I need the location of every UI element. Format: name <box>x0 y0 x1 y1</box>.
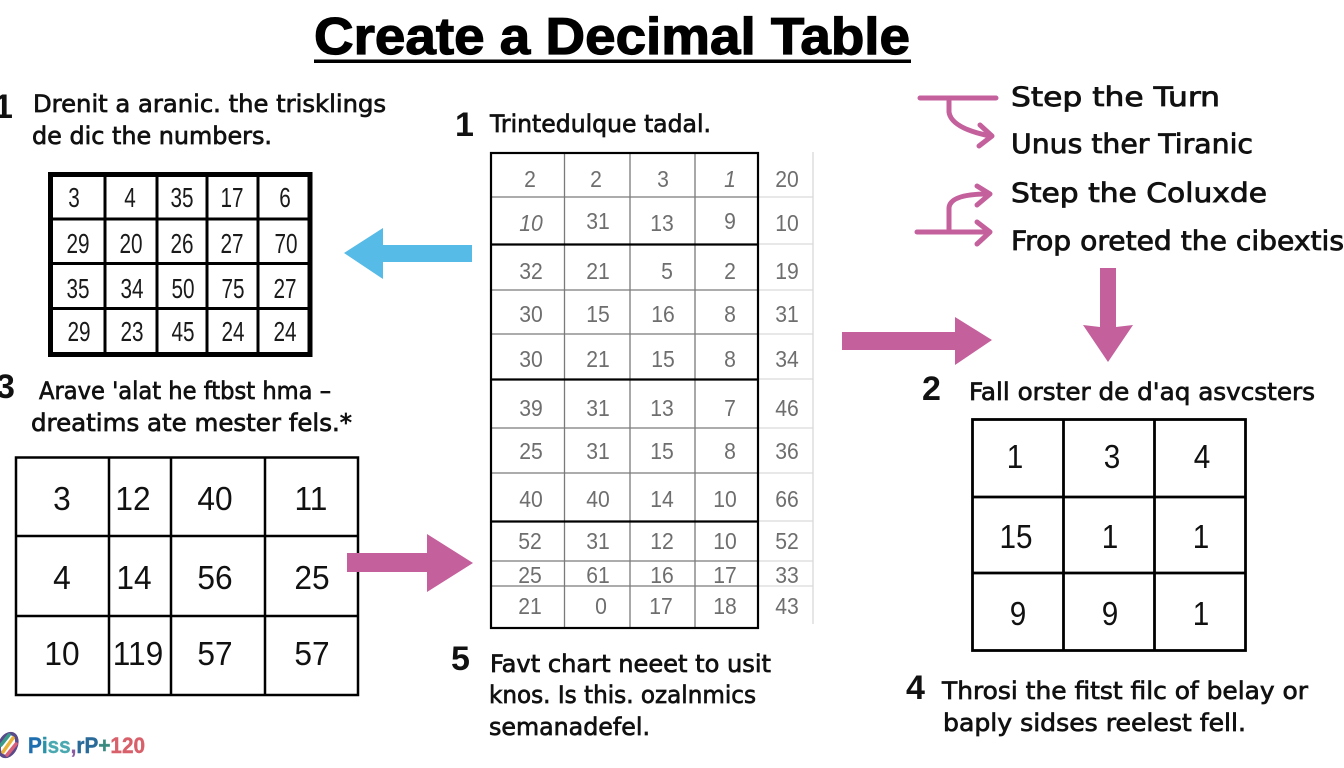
table: small 5x4 grid: 4 <box>124 183 136 214</box>
centre heading: Trintedulque tadal. <box>489 110 711 138</box>
step 4 text <box>941 677 1308 737</box>
table: 4x3 grid: 119 <box>113 635 163 672</box>
step number 4: 4 <box>906 669 925 707</box>
table: large centre table: 31 <box>775 301 799 327</box>
step list text: Unus ther Tiranic <box>1011 129 1253 160</box>
table: small 5x4 grid: 29 <box>66 229 90 260</box>
table: large centre table: 7 <box>724 395 736 421</box>
table: large centre table: 1 <box>724 166 736 192</box>
table: large centre table: 25 <box>519 438 543 464</box>
table: large centre table: 14 <box>650 486 674 512</box>
step 4 text: Throsi the fitst filc of belay or <box>941 677 1308 705</box>
table: large centre table: 46 <box>775 395 799 421</box>
table: small 5x4 grid: 6 <box>279 183 291 214</box>
arrow: pink right to step 2 <box>842 317 992 365</box>
table: large centre table: 31 <box>586 438 610 464</box>
table: small 5x4 grid: 17 <box>220 183 244 214</box>
table: large centre table: 25 <box>518 562 542 588</box>
table: 4x3 grid: 14 <box>116 559 152 596</box>
table: large centre table: 10 <box>775 210 799 236</box>
table: large centre table: 31 <box>586 528 610 554</box>
table: small 5x4 grid: 75 <box>221 274 245 305</box>
arrow: blue left <box>344 228 472 279</box>
table: 4x3 grid: 4 <box>53 559 71 596</box>
table: small 5x4 grid: 27 <box>273 274 297 305</box>
table: large centre table: 32 <box>519 258 543 284</box>
step 5 text: semanadefel. <box>489 713 650 741</box>
step 1 text: de dic the numbers. <box>32 122 272 150</box>
table: large centre table: 40 <box>519 486 543 512</box>
step 5 text <box>489 650 771 741</box>
step 5 text: knos. Is this. ozalnmics <box>489 681 756 709</box>
step number 5: 5 <box>451 640 470 678</box>
table: large centre table: 15 <box>651 346 675 372</box>
panel: top right step list <box>917 82 1344 257</box>
table: small 5x4 grid: 50 <box>171 274 195 305</box>
step 4 text: baply sidses reelest fell. <box>943 709 1246 737</box>
table: small 5x4 grid: 3 <box>68 183 80 214</box>
table: 4x3 grid: 40 <box>197 480 233 517</box>
arrow: pink right from step 3 table <box>347 534 473 592</box>
table: large centre table: 43 <box>775 593 799 619</box>
table: 3x3 grid: 4 <box>1194 439 1210 475</box>
table: 3x3 grid: 9 <box>1102 596 1118 632</box>
table: large centre table: 2 <box>724 258 736 284</box>
icon: branch arrow up <box>917 186 990 244</box>
table: large centre table: 21 <box>586 258 610 284</box>
table: 3x3 grid: 1 <box>1193 596 1209 632</box>
table: 3x3 grid: 15 <box>999 519 1033 555</box>
table: small 5x4 grid: 35 <box>66 274 90 305</box>
table: small 5x4 grid: 26 <box>170 229 194 260</box>
table: large centre table: 21 <box>586 346 610 372</box>
table: 4x3 grid: 10 <box>44 635 80 672</box>
table: large centre table: 15 <box>586 301 610 327</box>
table: large centre table: 8 <box>724 438 736 464</box>
table: small 5x4 grid: 70 <box>274 229 298 260</box>
table: large centre table: 16 <box>650 562 674 588</box>
table: 3x3 grid: 1 <box>1102 519 1118 555</box>
table: large centre table: 40 <box>586 486 610 512</box>
table: 4x3 grid: 57 <box>294 635 330 672</box>
step 3 text: dreatims ate mester fels.* <box>31 409 352 437</box>
table: large centre table: 30 <box>519 346 543 372</box>
step number 1 centre: 1 <box>455 106 474 144</box>
logo <box>0 731 145 759</box>
step list text: Step the Turn <box>1011 82 1220 113</box>
table: large centre table: 30 <box>519 301 543 327</box>
table: 4x3 grid <box>16 457 358 695</box>
table: large centre table <box>491 152 813 628</box>
table: large centre table: 9 <box>724 208 736 234</box>
table: 4x3 grid: 25 <box>294 559 330 596</box>
table: large centre table: 31 <box>586 208 610 234</box>
table: 3x3 grid <box>972 419 1246 651</box>
table: large centre table: 8 <box>724 346 736 372</box>
table: large centre table: 18 <box>713 593 737 619</box>
table: small 5x4 grid <box>50 174 310 354</box>
step 3 text <box>31 377 352 437</box>
table: 4x3 grid: 12 <box>115 480 151 517</box>
table: 3x3 grid: 1 <box>1193 519 1209 555</box>
table: 3x3 grid: 1 <box>1007 439 1023 475</box>
table: large centre table: 61 <box>586 562 610 588</box>
table: large centre table: 13 <box>650 210 674 236</box>
table: large centre table: 17 <box>649 593 673 619</box>
table: large centre table: 66 <box>775 486 799 512</box>
step list text <box>1011 82 1344 257</box>
table: large centre table: 17 <box>713 562 737 588</box>
table: small 5x4 grid: 34 <box>120 274 144 305</box>
title: Create a Decimal Table <box>314 8 910 66</box>
logo text: Piss,rP+120 <box>28 733 145 758</box>
step list text: Step the Coluxde <box>1011 178 1267 209</box>
panel: step 2 and 4 <box>906 370 1315 737</box>
table: 4x3 grid: 57 <box>197 635 233 672</box>
arrow: pink down <box>1083 268 1133 362</box>
panel: step 3 instructions and table <box>0 368 358 695</box>
panel: step 1 instructions and table <box>0 88 386 354</box>
step number 2: 2 <box>922 370 941 408</box>
table: 4x3 grid: 11 <box>295 480 327 517</box>
step list text: Frop oreted the cibextis <box>1011 226 1344 257</box>
table: large centre table: 16 <box>651 301 675 327</box>
table: large centre table: 3 <box>657 166 669 192</box>
table: large centre table: 21 <box>518 593 542 619</box>
table: large centre table: 34 <box>775 346 799 372</box>
table: large centre table: 10 <box>713 528 737 554</box>
icon: logo mark <box>0 731 20 759</box>
table: large centre table: 31 <box>586 395 610 421</box>
table: small 5x4 grid: 45 <box>171 317 195 348</box>
table: large centre table: 36 <box>775 438 799 464</box>
table: 4x3 grid: 56 <box>197 559 233 596</box>
table: 3x3 grid: 9 <box>1010 596 1026 632</box>
table: large centre table: 2 <box>524 166 536 192</box>
step 1 text <box>32 90 386 150</box>
table: large centre table: 8 <box>724 301 736 327</box>
table: large centre table: 2 <box>590 166 602 192</box>
table: large centre table: 15 <box>650 438 674 464</box>
table: large centre table: 19 <box>775 258 799 284</box>
table: small 5x4 grid: 23 <box>120 317 144 348</box>
icon: branch arrow down <box>920 98 996 146</box>
table: large centre table: 10 <box>519 210 543 236</box>
table: large centre table: 12 <box>650 528 674 554</box>
table: large centre table: 20 <box>775 166 799 192</box>
table: large centre table: 33 <box>775 562 799 588</box>
table: large centre table: 0 <box>595 593 607 619</box>
table: large centre table: 5 <box>661 258 673 284</box>
table: 4x3 grid: 3 <box>53 480 71 517</box>
table: small 5x4 grid: 20 <box>119 229 143 260</box>
table: small 5x4 grid: 24 <box>273 317 297 348</box>
step 3 text: Arave 'alat he ftbst hma – <box>39 377 331 405</box>
table: large centre table: 10 <box>713 486 737 512</box>
table: large centre table: 52 <box>518 528 542 554</box>
panel: centre column <box>451 106 813 741</box>
table: large centre table: 39 <box>519 395 543 421</box>
step 2 text: Fall orster de d'aq asvcsters <box>969 378 1315 406</box>
step 1 text: Drenit a aranic. the trisklings <box>33 90 386 118</box>
table: small 5x4 grid: 27 <box>220 229 244 260</box>
table: large centre table: 52 <box>775 528 799 554</box>
step 5 text: Favt chart neeet to usit <box>490 650 771 678</box>
table: large centre table: 13 <box>650 395 674 421</box>
table: small 5x4 grid: 35 <box>170 183 194 214</box>
table: small 5x4 grid: 29 <box>67 317 91 348</box>
table: small 5x4 grid: 24 <box>221 317 245 348</box>
table: 3x3 grid: 3 <box>1104 439 1120 475</box>
